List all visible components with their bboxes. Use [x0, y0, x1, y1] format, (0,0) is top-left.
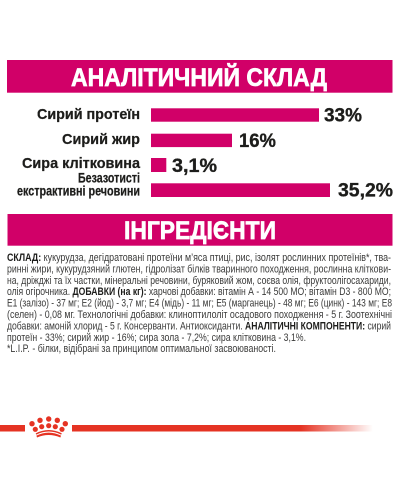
- icon: crown logo: [29, 416, 68, 438]
- text block: ingredients list: [7, 252, 392, 355]
- row: crude protein: [37, 106, 362, 127]
- row: crude fat: 16%: [239, 131, 276, 152]
- bar chart: analytical composition: [17, 106, 393, 202]
- row: nitrogen-free extractives: 35,2%: [338, 181, 393, 202]
- row: crude fibre: Сира клітковина: [22, 155, 141, 172]
- row: crude protein: 33%: [324, 106, 362, 127]
- row: nitrogen-free extractives: екстрактивні речовини: [17, 184, 140, 199]
- text block: ingredients list: протеїн - 33%; сирий жир - 16%; сира зола - 7,2%; сира клітковина - 3,1%.: [7, 332, 306, 344]
- footer rule with fade: [0, 425, 373, 432]
- text block: ingredients list: *L.I.P. - білки, відібрані за принципом оптимальної засвоюваності.: [7, 343, 276, 355]
- row: crude fat: [62, 131, 276, 152]
- row: crude protein: Сирий протеїн: [37, 106, 140, 123]
- row: nitrogen-free extractives: [17, 170, 393, 202]
- panel: ingredients heading: ІНГРЕДІЄНТИ: [124, 217, 276, 245]
- row: crude fibre: 3,1%: [172, 156, 217, 177]
- row: nitrogen-free extractives: Безазотисті: [78, 170, 140, 186]
- row: crude fat: Сирий жир: [62, 131, 140, 148]
- panel: analytical composition heading: [7, 60, 392, 93]
- text block: ingredients list: добавки: амоній хлорид - 5 г. Консерванти. Антиоксиданти. АНАЛІТИЧНІ КОМПОНЕНТИ: сирий: [7, 320, 391, 332]
- panel: ingredients heading: [8, 214, 392, 246]
- row: crude fibre: [22, 155, 217, 177]
- panel: analytical composition heading: АНАЛІТИЧНИЙ СКЛАД: [71, 62, 327, 92]
